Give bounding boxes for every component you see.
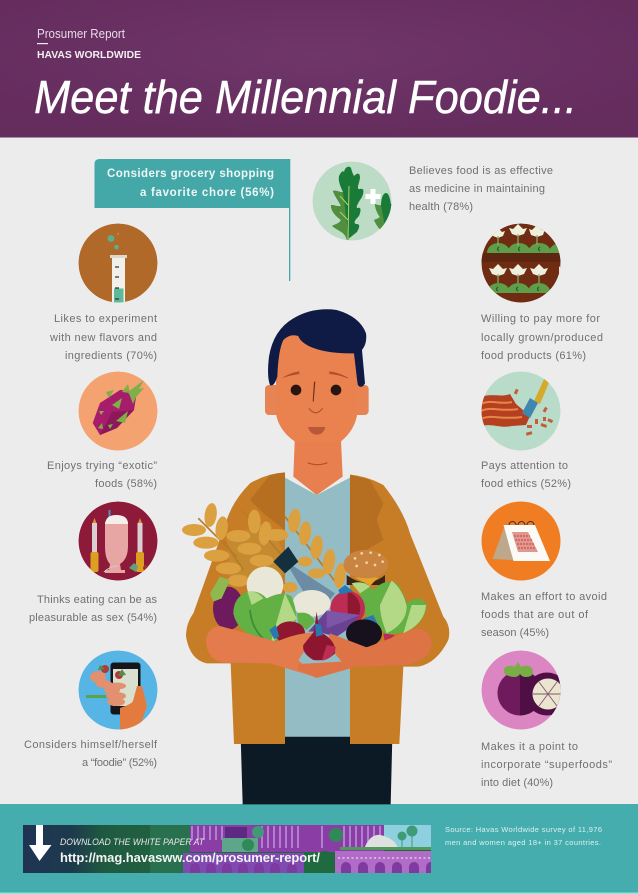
text: pleasurable: Thinks eating can be as	[37, 594, 158, 606]
text: exotic: foods (58%)	[95, 478, 157, 490]
icon: arugula leaves	[312, 162, 397, 240]
character: man holding food	[182, 309, 449, 804]
jacket	[186, 472, 285, 744]
plus sign	[366, 189, 380, 204]
text: medicine: Believes food is as effective	[409, 165, 553, 177]
text: ethics	[481, 460, 571, 490]
text: pleasurable: pleasurable as sex (54%)	[29, 612, 157, 624]
text: foodie: a “foodie” (52%)	[82, 757, 157, 769]
text: local food: Willing to pay more for	[481, 313, 600, 325]
text: superfoods: into diet (40%)	[481, 777, 553, 789]
callout: grocery shopping	[94, 159, 290, 281]
icon: farm rows	[482, 224, 560, 302]
red vegetables	[330, 591, 365, 626]
eggs and eggplant	[213, 587, 244, 630]
source note: men and women aged 18+ in 37 countries.	[445, 838, 601, 847]
text: experiment	[49, 313, 157, 362]
icon: dragon fruit	[78, 372, 158, 450]
text: exotic: Enjoys trying “exotic”	[47, 460, 157, 472]
text: season: season (45%)	[481, 627, 549, 639]
source note: Source: Havas Worldwide survey of 11,976	[445, 825, 602, 834]
city illustration	[150, 825, 436, 873]
url: http://mag.havasww.com/prosumer-report/	[60, 850, 320, 865]
left lettuce	[233, 591, 315, 645]
icon: phone with food photo	[78, 650, 158, 736]
wheat	[182, 502, 347, 593]
icon: mangosteen	[482, 650, 568, 730]
header banner	[0, 0, 638, 138]
text: local food: food products (61%)	[481, 350, 586, 362]
footer band	[0, 804, 638, 894]
callout: grocery shopping: a favorite chore (56%)	[140, 187, 274, 199]
download text: DOWNLOAD THE WHITE PAPER AT	[60, 837, 205, 848]
text: foodie: Considers himself/herself	[24, 739, 158, 751]
onion	[303, 612, 335, 660]
callout: grocery shopping: Considers grocery shopping	[107, 168, 274, 180]
text: season: foods that are out of	[481, 609, 589, 621]
text: exotic	[47, 460, 157, 490]
icon: test tube	[78, 224, 158, 307]
icon: calendar	[482, 502, 560, 580]
t-shirt	[285, 478, 350, 737]
report label: Prosumer Report	[37, 27, 125, 41]
text: superfoods: Makes it a point to	[481, 741, 578, 753]
burger	[343, 550, 388, 586]
text: local food: locally grown/produced	[481, 332, 603, 344]
text: medicine: as medicine in maintaining	[409, 183, 545, 195]
download arrow	[29, 825, 52, 861]
text: ethics: Pays attention to	[481, 460, 568, 472]
title: Meet the Millennial Foodie...	[34, 71, 577, 123]
brand name: HAVAS WORLDWIDE	[37, 49, 141, 61]
arms and hands	[206, 626, 317, 677]
text: season	[481, 591, 607, 639]
text: season: Makes an effort to avoid	[481, 591, 607, 603]
text: experiment: with new flavors and	[49, 332, 157, 344]
body	[182, 472, 449, 804]
text: local food	[481, 313, 603, 362]
text: experiment: ingredients (70%)	[65, 350, 157, 362]
icon: milkshake and candles	[78, 502, 158, 580]
icon: bacon and peeler	[480, 372, 560, 450]
head and neck	[265, 309, 369, 495]
download banner	[23, 825, 436, 873]
text: foodie	[24, 739, 158, 769]
right lettuce	[352, 581, 427, 635]
text: pleasurable	[29, 594, 158, 624]
text: medicine: health (78%)	[409, 201, 473, 213]
text: ethics: food ethics (52%)	[481, 478, 571, 490]
text: superfoods	[481, 741, 612, 789]
source note	[445, 825, 602, 847]
text: medicine	[409, 165, 553, 213]
purple vegetable	[308, 611, 360, 637]
knife	[285, 561, 335, 603]
pants	[241, 737, 392, 804]
text: superfoods: incorporate “superfoods”	[481, 759, 612, 771]
text: experiment: Likes to experiment	[54, 313, 157, 325]
